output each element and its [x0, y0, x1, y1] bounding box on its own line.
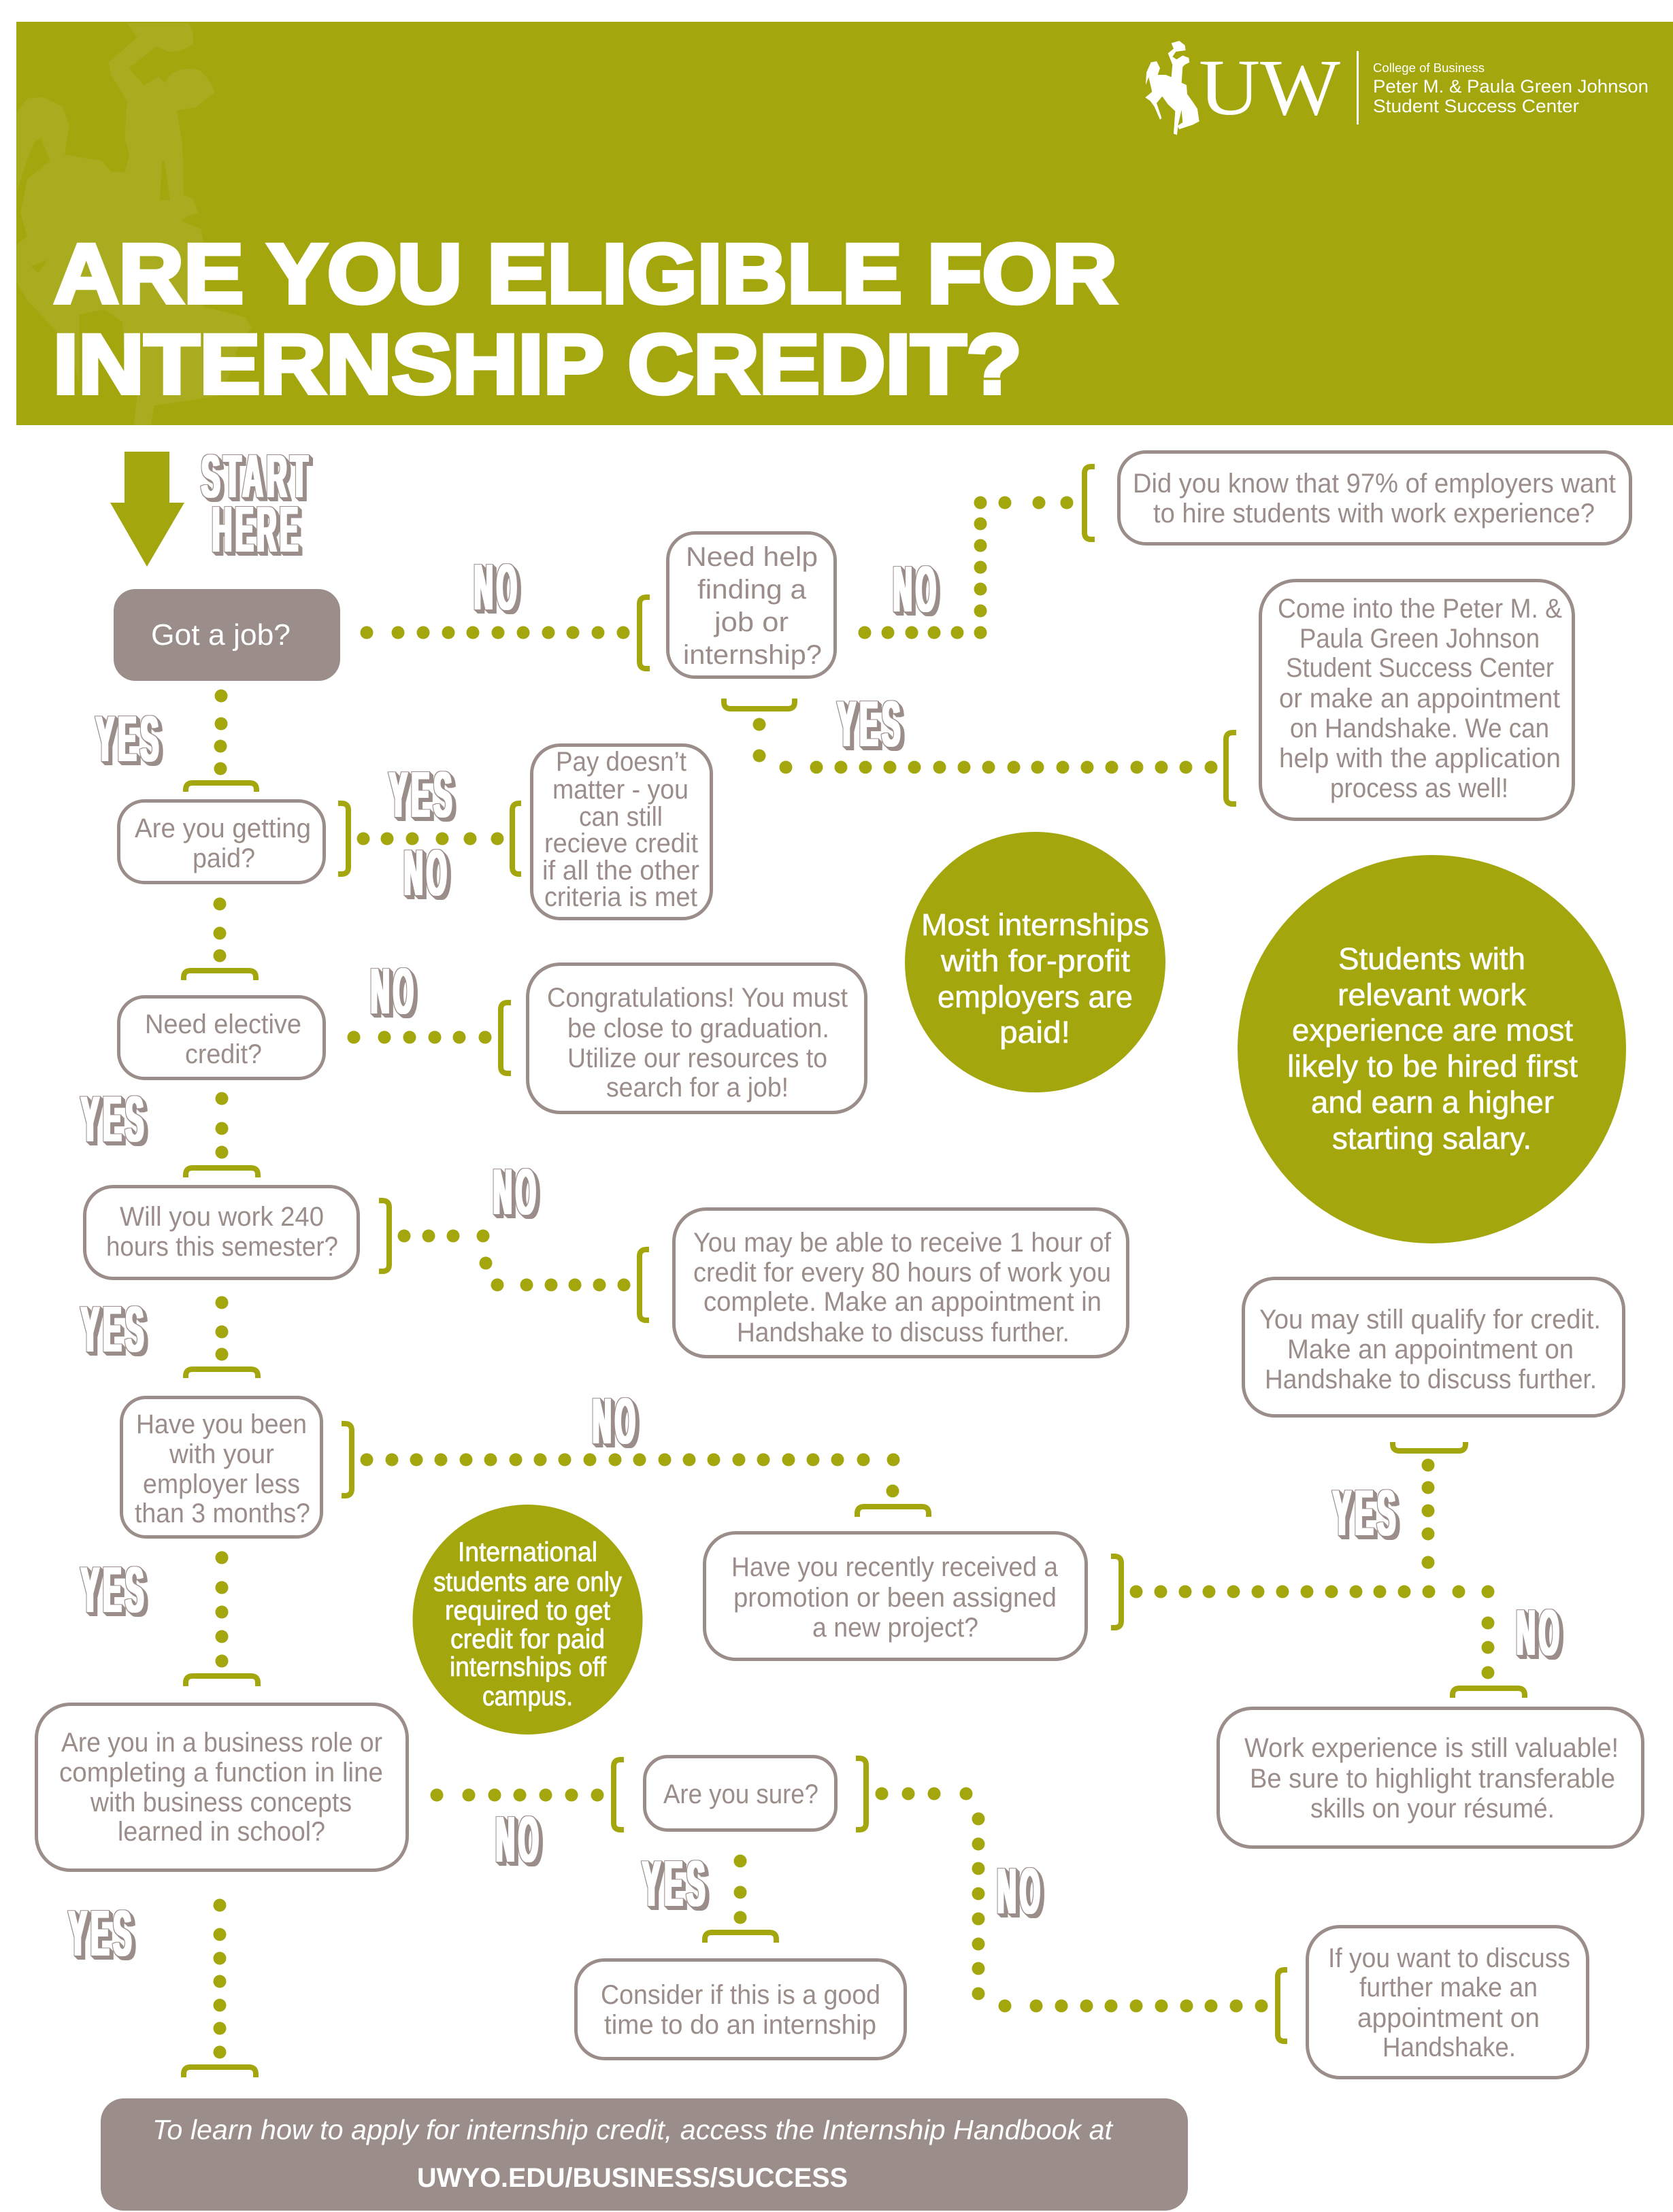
box: Pay doesn't matter: criteria is met — [544, 882, 697, 912]
logo: UW College of Business: Peter M. & Paula Green Johnson — [1373, 76, 1649, 97]
box: You may be able to receive: You may be able to receive 1 hour of — [693, 1228, 1112, 1258]
logo: UW College of Business — [1145, 41, 1649, 135]
connector: business role, no — [430, 1760, 624, 1830]
title: ARE YOU ELIGIBLE FOR — [54, 227, 1117, 321]
box: Have you been with your employer — [121, 1397, 321, 1537]
box: Consider if this is a good time — [576, 1960, 905, 2058]
text: NO — [404, 837, 450, 909]
text: YES — [69, 1897, 135, 1970]
box: If you want to discuss further: appointment on — [1357, 2003, 1540, 2033]
box: Did you know: to hire students with work experience? — [1153, 499, 1595, 529]
logo: UW College of Business: Student Success Center — [1373, 96, 1579, 116]
text: START — [201, 443, 312, 511]
connector: are you sure, no — [856, 1758, 1287, 2041]
box: Pay doesn't matter: Pay doesn’t — [556, 747, 686, 777]
box: You may still qualify — [1244, 1279, 1623, 1416]
connector: got a job, yes — [186, 690, 256, 792]
title: INTERNSHIP CREDIT? — [53, 318, 1022, 412]
box: Need elective credit?: credit? — [185, 1039, 262, 1069]
icon: faded cowboy watermark — [17, 23, 252, 425]
box: Congratulations — [528, 965, 865, 1113]
callout: most internships are paid: with for-profit — [940, 943, 1131, 978]
connector: promotion, yes and no — [1111, 1442, 1525, 1698]
text: NO — [593, 1385, 639, 1458]
box: Congratulations: Congratulations! You must — [547, 983, 848, 1013]
box: Come into the center: process as well! — [1330, 773, 1508, 803]
callout: international students: students are only — [433, 1567, 622, 1597]
box: You may be able to receive: Handshake to discuss further. — [737, 1318, 1070, 1347]
text: YES — [389, 758, 456, 831]
box: Are you getting paid? — [118, 801, 324, 883]
connector: elective, yes — [186, 1092, 258, 1177]
text: YES — [1333, 1477, 1399, 1549]
box: Work experience is still valuable: Be sure to highlight transferable — [1250, 1764, 1615, 1794]
box: Pay doesn't matter: matter - you — [552, 775, 689, 805]
box: Consider if this is a good time: Consider if this is a good — [601, 1980, 880, 2010]
box: Have you been with your employer: than 3 months? — [135, 1498, 310, 1528]
box: Need help finding a job or internship?: Need help — [686, 542, 818, 572]
connector: 240 hours, no — [379, 1201, 649, 1320]
connector: got a job, no — [361, 597, 650, 669]
box: Are you sure?: Are you sure? — [663, 1779, 818, 1809]
box: If you want to discuss further — [1308, 1926, 1588, 2077]
connector: 3 months, no — [342, 1424, 929, 1517]
box: Are you in a business role — [37, 1705, 407, 1871]
box: Congratulations: search for a job! — [606, 1073, 789, 1103]
callout: students with relevant work experience: relevant work — [1338, 977, 1527, 1012]
text: NO — [493, 1156, 540, 1228]
box: Have you recently received a promotion: promotion or been assigned — [733, 1583, 1057, 1613]
box: Have you recently received a promotion — [705, 1533, 1086, 1660]
text: HERE — [212, 493, 301, 566]
text: YES — [81, 1554, 148, 1626]
box: Work experience is still valuable: skills on your résumé. — [1310, 1794, 1555, 1824]
box: Will you work 240 hours — [84, 1186, 358, 1279]
box: Are you sure? — [645, 1756, 835, 1830]
box: Come into the center: on Handshake. We can — [1290, 714, 1549, 743]
callout: international students: required to get — [445, 1596, 610, 1626]
box: If you want to discuss further: further make an — [1359, 1973, 1538, 2002]
box: Pay doesn't matter: recieve credit — [544, 828, 698, 858]
callout: students with relevant work experience: experience are most — [1292, 1013, 1574, 1048]
callout: international students: campus. — [482, 1681, 573, 1711]
text: NO — [893, 553, 940, 626]
connector: need help, no — [859, 467, 1095, 639]
box: Did you know — [1119, 452, 1630, 544]
box: Will you work 240 hours: hours this semester? — [106, 1232, 338, 1262]
box: Work experience is still valuable — [1218, 1709, 1642, 1847]
callout: students with relevant work experience — [1238, 855, 1626, 1243]
connector: 3 months, yes — [186, 1551, 258, 1686]
panel: header banner — [16, 22, 1673, 425]
box: Will you work 240 hours: Will you work 240 — [120, 1202, 324, 1232]
box: Are you in a business role: Are you in a business role or — [61, 1728, 382, 1758]
box: Work experience is still valuable: Work experience is still valuable! — [1244, 1733, 1619, 1763]
footer panel — [101, 2098, 1188, 2211]
box: Pay doesn't matter: can still — [579, 802, 663, 832]
box: Pay doesn't matter — [532, 745, 712, 918]
box: You may be able to receive: credit for every 80 hours of work you — [693, 1258, 1111, 1288]
callout: students with relevant work experience: likely to be hired first — [1287, 1049, 1578, 1084]
logo: UW College of Business: UW — [1199, 43, 1341, 132]
box: Come into the center: help with the application — [1279, 743, 1561, 773]
connector: business role, yes — [184, 1899, 256, 2077]
callout: most internships are paid: paid! — [999, 1015, 1070, 1050]
footer panel: UWYO.EDU/BUSINESS/SUCCESS — [417, 2163, 848, 2193]
callout: international students: International — [458, 1537, 597, 1567]
text: NO — [496, 1803, 542, 1876]
box: You may still qualify: You may still qualify for credit. — [1259, 1305, 1601, 1335]
box: Are you in a business role: completing a function in line — [59, 1758, 383, 1788]
text: NO — [997, 1855, 1044, 1928]
box: Did you know: Did you know that 97% of employers want — [1133, 469, 1616, 499]
text: NO — [371, 955, 417, 1028]
box: If you want to discuss further: Handshake. — [1382, 2032, 1516, 2062]
box: Have you been with your employer: employer less — [143, 1469, 300, 1499]
label: START HERE — [201, 443, 312, 566]
box: Are you getting paid?: Are you getting — [135, 814, 311, 843]
box: Need help finding a job or internship?: internship? — [683, 640, 822, 670]
callout: international students: internships off — [450, 1652, 607, 1682]
box: Are you in a business role: with business concepts — [90, 1788, 352, 1817]
box: Need help finding a job or internship?: finding a — [697, 575, 807, 605]
text: YES — [96, 703, 163, 775]
box: Have you been with your employer: with your — [169, 1439, 274, 1469]
box: You may still qualify: Make an appointment on — [1287, 1335, 1574, 1364]
box: Pay doesn't matter: if all the other — [542, 856, 699, 886]
box: Got a job?: Got a job? — [151, 618, 291, 652]
box: Come into the center: Paula Green Johnson — [1299, 624, 1540, 654]
callout: most internships are paid: Most internships — [921, 907, 1149, 942]
footer panel: To learn how to apply for internship credit, access the Internship Handbook at — [152, 2114, 1114, 2145]
callout: students with relevant work experience: Students with — [1338, 941, 1525, 976]
box: You may be able to receive — [674, 1209, 1128, 1356]
callout: international students: credit for paid — [450, 1624, 605, 1654]
box: Come into the center: Come into the Peter M. & — [1278, 594, 1562, 624]
box: Congratulations: Utilize our resources to — [567, 1043, 827, 1073]
callout: students with relevant work experience: starting salary. — [1332, 1121, 1531, 1156]
box: Are you getting paid?: paid? — [193, 843, 255, 873]
box: Need elective credit? — [118, 997, 324, 1079]
connector: 240 hours, yes — [186, 1296, 258, 1378]
box: Have you recently received a promotion: a new project? — [812, 1613, 978, 1643]
box: Need help finding a job or internship? — [668, 533, 835, 677]
box: If you want to discuss further: If you want to discuss — [1328, 1943, 1570, 1973]
text: YES — [81, 1083, 148, 1156]
box: You may still qualify: Handshake to discuss further. — [1265, 1364, 1597, 1394]
connector: are you sure, yes — [705, 1854, 776, 1943]
callout: most internships are paid — [905, 832, 1165, 1092]
title — [53, 227, 1117, 412]
icon: bucking horse and rider — [1145, 41, 1199, 135]
arrow: start — [110, 452, 184, 567]
connector: need help, yes — [724, 699, 1236, 804]
box: Are you in a business role: learned in school? — [118, 1817, 325, 1847]
box: Consider if this is a good time: time to do an internship — [604, 2010, 876, 2040]
callout: international students — [412, 1505, 642, 1735]
callout: most internships are paid: employers are — [938, 979, 1133, 1014]
box: You may be able to receive: complete. Make an appointment in — [703, 1287, 1101, 1317]
text: YES — [642, 1847, 709, 1920]
box: Have you recently received a promotion: Have you recently received a — [731, 1552, 1059, 1582]
box: Have you been with your employer: Have you been — [136, 1409, 307, 1439]
box: Come into the center — [1260, 581, 1573, 819]
connector: paid, down — [184, 898, 256, 980]
box: Come into the center: Student Success Center — [1286, 653, 1554, 683]
box: Congratulations: be close to graduation. — [567, 1013, 829, 1043]
box: Come into the center: or make an appointment — [1279, 684, 1560, 714]
box: Got a job? — [114, 589, 340, 681]
connector: paid, yes/no — [338, 803, 521, 874]
text: YES — [81, 1293, 148, 1366]
box: Need help finding a job or internship?: job or — [714, 607, 789, 637]
logo: UW College of Business: College of Business — [1373, 61, 1485, 75]
text: NO — [474, 551, 520, 624]
box: Need elective credit?: Need elective — [145, 1009, 301, 1039]
callout: students with relevant work experience: and earn a higher — [1311, 1085, 1554, 1120]
text: YES — [838, 688, 904, 760]
connector: elective, no — [347, 1003, 511, 1073]
text: NO — [1517, 1596, 1563, 1669]
